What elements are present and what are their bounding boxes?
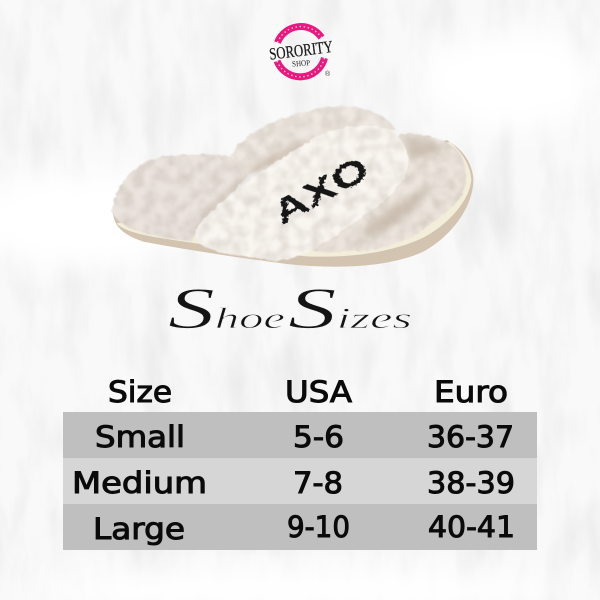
row label: Small: Small (95, 420, 185, 454)
logo ring top arc (278, 27, 322, 42)
back strap shadow (247, 138, 317, 175)
logo sub-wordmark: SHOP (292, 58, 311, 69)
USA value: Medium: 7-8 (293, 466, 343, 500)
front strap (195, 126, 408, 261)
Euro value: Medium: 38-39 (427, 466, 515, 500)
strap letters AXO: AXO (267, 150, 375, 233)
row label: Medium: Medium (72, 466, 207, 500)
table row band: Small (63, 412, 537, 458)
USA value: Small: 5-6 (293, 420, 344, 454)
row label: Large: Large (93, 512, 185, 546)
front strap shadow on toe (192, 175, 250, 235)
logo ring dots (277, 27, 324, 77)
back strap (231, 106, 396, 177)
logo: Sorority Shop (268, 27, 334, 78)
slipper photo illustration (112, 106, 473, 267)
logo wordmark: SORORITY (268, 37, 334, 64)
Euro value: Small: 36-37 (427, 420, 514, 454)
insole (117, 142, 471, 257)
title: Shoe Sizes (168, 276, 412, 341)
column header: Euro: Euro (434, 375, 508, 409)
size table (63, 375, 537, 550)
logo registered mark: ® (325, 70, 331, 78)
column header: Size: Size (108, 375, 172, 409)
USA value: Large: 9-10 (287, 510, 350, 544)
title word: Sizes: S izes (288, 276, 412, 341)
title word: Shoe: S hoe (168, 276, 285, 341)
table row band: Medium (63, 458, 537, 504)
column header: USA: USA (285, 375, 352, 409)
Euro value: Large: 40-41 (428, 510, 515, 544)
heel footbed fur (287, 134, 466, 252)
sole (113, 140, 473, 267)
heel fur shading (363, 138, 443, 240)
logo ring bottom arc (277, 58, 324, 77)
toe footbed fur (112, 154, 252, 242)
table row band: Large (63, 504, 537, 550)
